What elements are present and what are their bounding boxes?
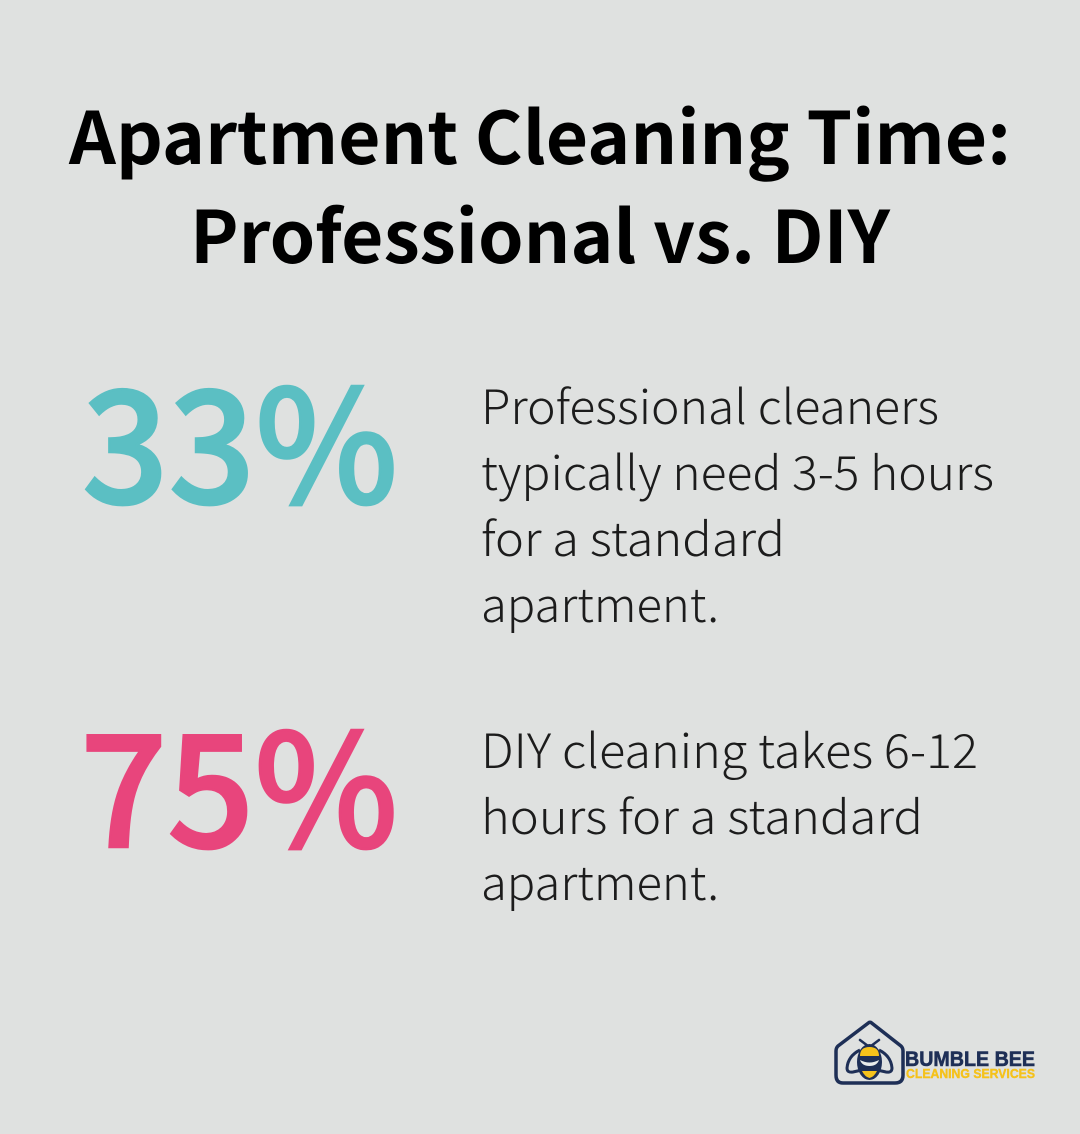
stat: 33%: 33% [82, 322, 398, 548]
title [68, 80, 1011, 284]
icon: house with bee [836, 1022, 903, 1083]
text block: DIY cleaning: apartment. [481, 845, 719, 914]
text block: professional cleaners: Professional cleaners [481, 369, 939, 438]
stat: 75%: 75% [80, 666, 398, 892]
logo text: BUMBLE BEE [905, 1048, 1035, 1071]
title: Professional vs. DIY [190, 179, 891, 284]
logo text: CLEANING SERVICES [906, 1067, 1035, 1081]
text block: DIY cleaning: hours for a standard [481, 779, 923, 848]
text block: professional cleaners: for a standard [481, 501, 785, 570]
text block: professional cleaners: typically need 3-5 hours [481, 435, 994, 504]
text block: DIY cleaning: DIY cleaning takes 6-12 [481, 713, 978, 782]
logo: Bumble Bee Cleaning Services [836, 1022, 1035, 1083]
logo text [905, 1048, 1035, 1081]
text block: professional cleaners: apartment. [481, 567, 719, 636]
text block: professional cleaners [481, 369, 994, 636]
title: Apartment Cleaning Time: [68, 80, 1011, 185]
text block: DIY cleaning [481, 713, 978, 914]
